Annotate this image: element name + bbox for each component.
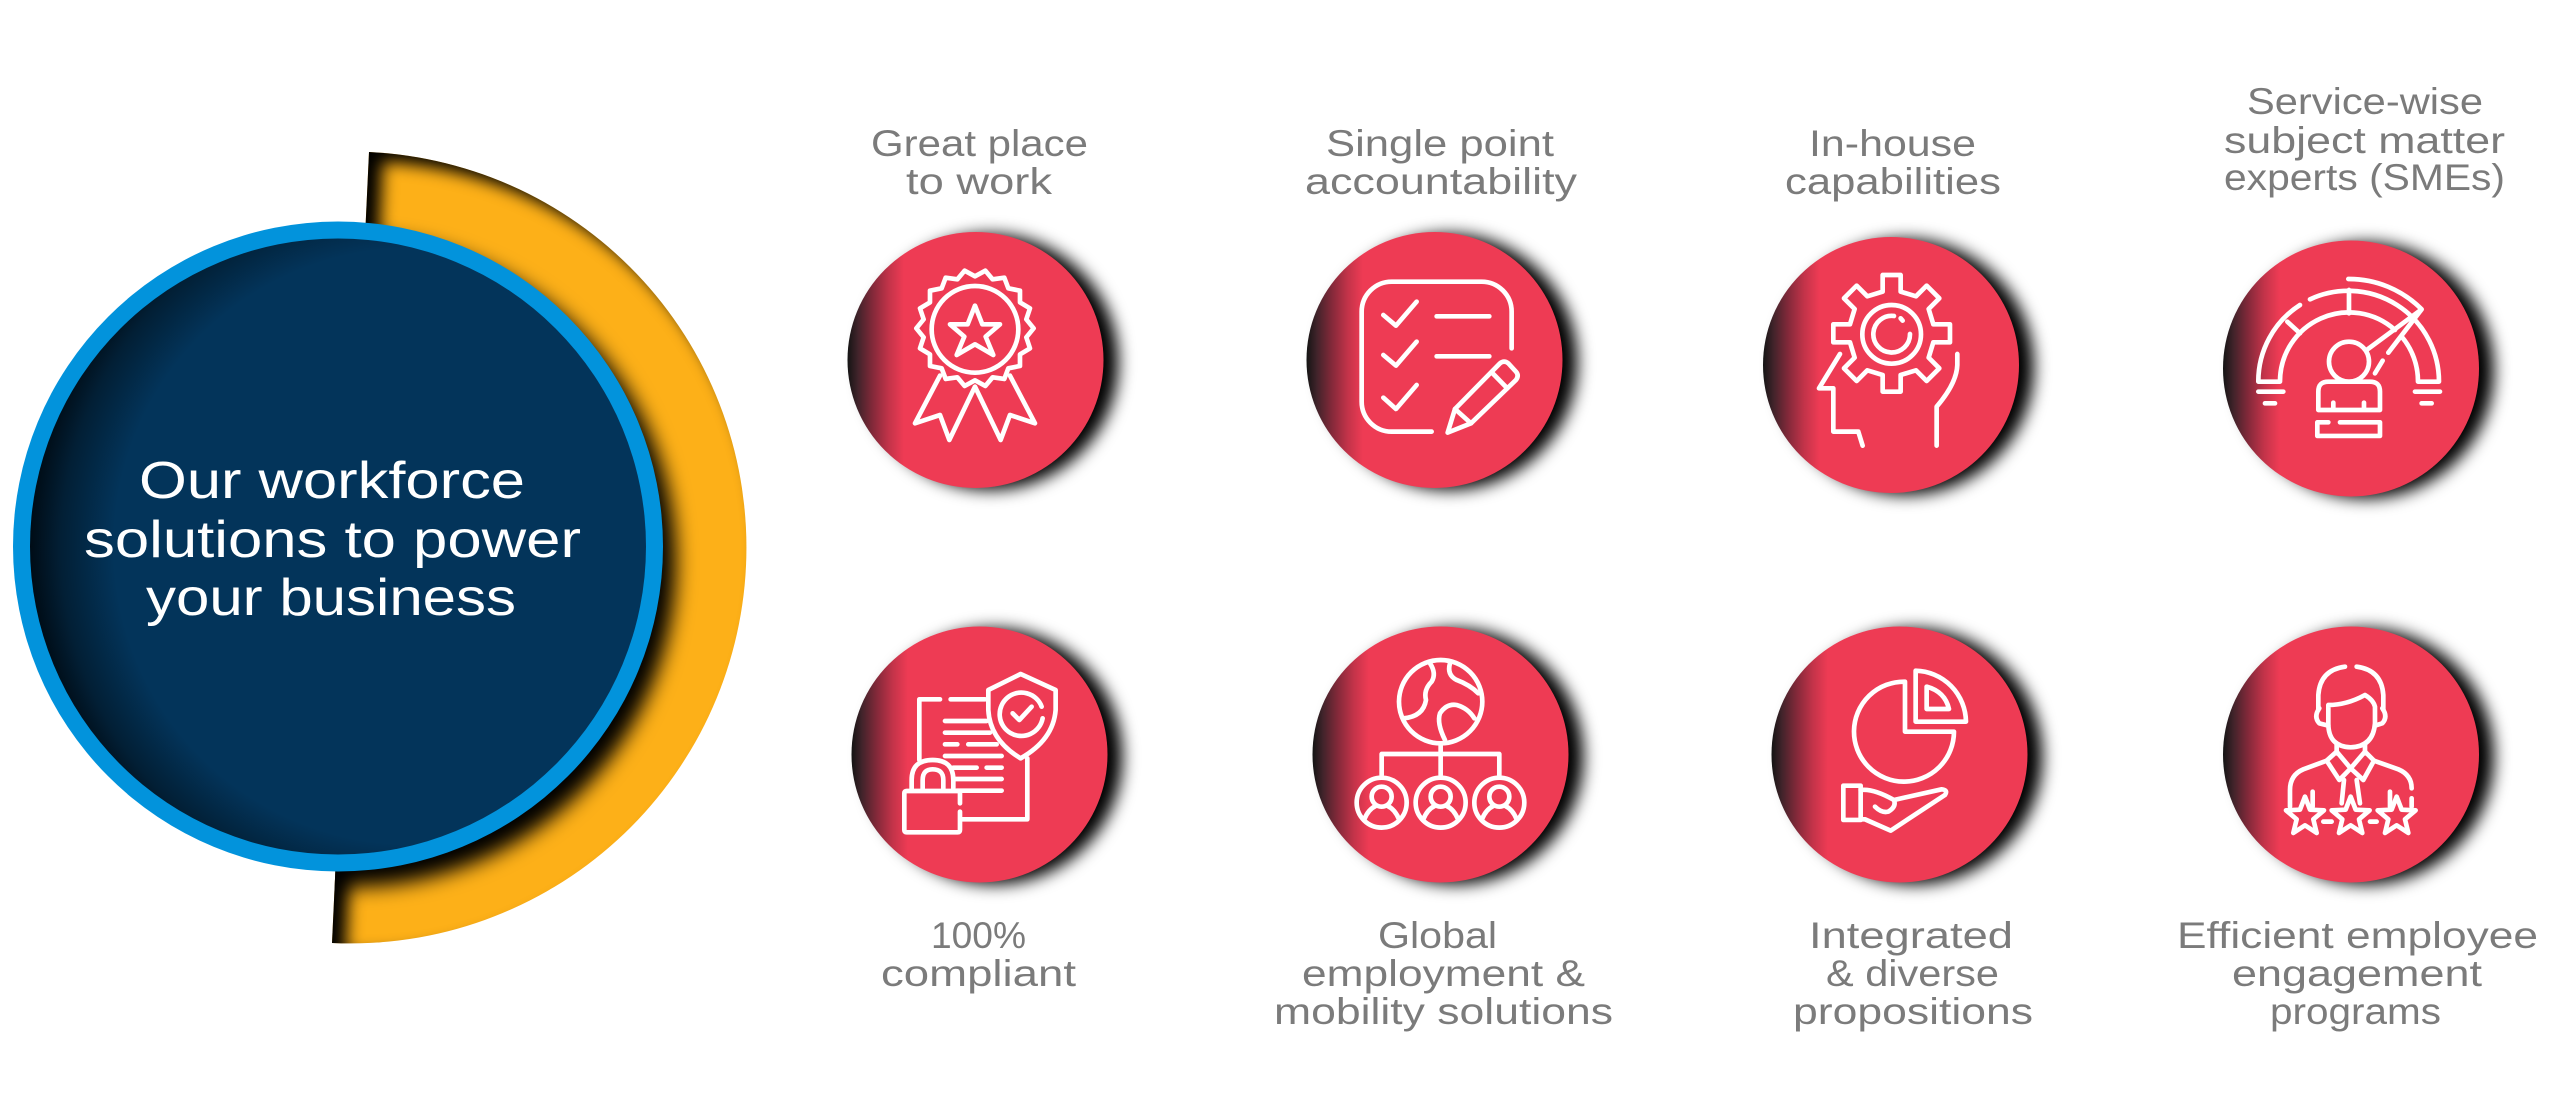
label: In-house — [1809, 123, 1976, 164]
panel: in-house capabilities — [1763, 123, 2019, 493]
title — [84, 452, 581, 627]
icon: checklist and pencil — [1362, 282, 1518, 433]
panel: service-wise subject matter experts — [2223, 81, 2505, 496]
navy disc — [30, 238, 646, 854]
label: Great place — [871, 123, 1088, 164]
label — [1305, 123, 1578, 202]
title: solutions to power — [84, 511, 581, 569]
label: Efficient employee — [2177, 915, 2538, 956]
yellow semicircle backdrop — [332, 152, 746, 943]
label: Single point — [1326, 123, 1555, 164]
shadow cast on yellow semicircle — [334, 222, 694, 904]
label: employment & — [1302, 953, 1585, 994]
icon: pie chart on hand — [1843, 671, 1966, 831]
title: your business — [146, 569, 516, 627]
label: Global — [1378, 915, 1497, 956]
label: compliant — [881, 953, 1077, 994]
red circle — [1772, 626, 2028, 882]
label — [881, 915, 1077, 994]
red circle — [1312, 626, 1568, 882]
icon: gauge with person — [2258, 279, 2440, 436]
icon: document, shield and lock — [904, 674, 1056, 832]
icon: head with gear — [1819, 275, 1957, 446]
icon: award rosette — [915, 271, 1035, 440]
label: to work — [906, 161, 1053, 202]
label — [1274, 915, 1613, 1032]
label: programs — [2270, 991, 2441, 1032]
red circle — [1763, 237, 2019, 493]
panel: single point accountability — [1305, 123, 1578, 488]
panel: efficient employee engagement programs — [2177, 626, 2538, 1032]
red circle — [2223, 240, 2479, 496]
label — [2224, 81, 2505, 198]
label: 100% — [931, 915, 1026, 956]
red circle — [848, 232, 1104, 488]
panel: global employment and mobility solutions — [1274, 626, 1613, 1032]
icon: employee with stars — [2286, 667, 2416, 833]
label: & diverse — [1826, 953, 1999, 994]
label: accountability — [1305, 161, 1578, 202]
label — [1785, 123, 2001, 202]
panel: 100% compliant — [852, 626, 1108, 994]
label: mobility solutions — [1274, 991, 1613, 1032]
red circle — [1306, 232, 1562, 488]
label: subject matter — [2224, 120, 2505, 161]
panel: central circle with title — [13, 152, 746, 943]
label: Service-wise — [2247, 81, 2483, 122]
label — [871, 123, 1088, 202]
label: experts (SMEs) — [2224, 157, 2505, 198]
label — [1793, 915, 2033, 1032]
panel: integrated and diverse propositions — [1772, 626, 2033, 1032]
red circle — [2223, 626, 2479, 882]
label: Integrated — [1809, 915, 2013, 956]
label — [2177, 915, 2538, 1032]
panel: great place to work — [848, 123, 1104, 488]
red circle — [852, 626, 1108, 882]
icon: globe and people network — [1357, 660, 1524, 828]
title: Our workforce — [139, 452, 525, 510]
blue ring — [13, 222, 663, 872]
label: propositions — [1793, 991, 2033, 1032]
label: capabilities — [1785, 161, 2001, 202]
label: engagement — [2232, 953, 2483, 994]
